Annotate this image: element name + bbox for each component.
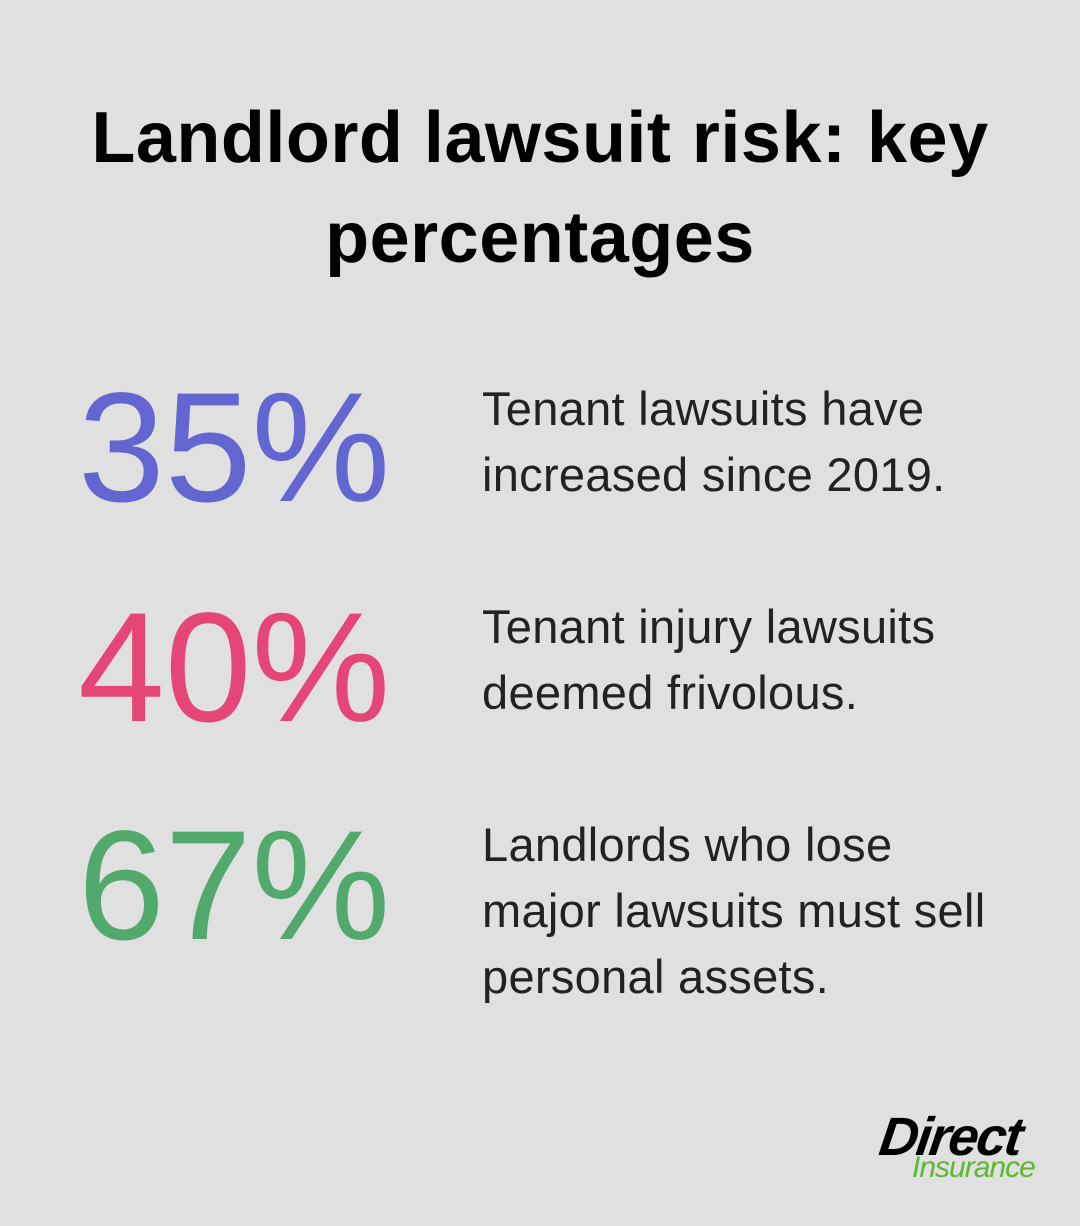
text: tenant lawsuits: increased since 2019. [482,448,946,501]
text: injury lawsuits: Tenant injury lawsuits [482,600,935,653]
number: 40%: 40% [78,581,390,755]
text: tenant lawsuits: Tenant lawsuits have [482,382,924,435]
logo: Direct [876,1107,1025,1167]
stat row: 67% [78,799,985,1003]
number: 67%: 67% [78,799,390,973]
text: landlords lose: personal assets. [482,950,829,1003]
text: landlords lose [482,818,985,1003]
title: percentages [325,198,755,278]
text: tenant lawsuits [482,382,946,501]
stat row: 40% [78,581,935,755]
title [91,98,989,278]
stat row: 35% [78,361,946,535]
title: Landlord lawsuit risk: key [91,98,989,178]
text: landlords lose: Landlords who lose [482,818,892,871]
text: injury lawsuits [482,600,935,719]
number: 35%: 35% [78,361,390,535]
text: injury lawsuits: deemed frivolous. [482,666,858,719]
logo: Insurance [912,1151,1035,1184]
text: landlords lose: major lawsuits must sell [482,884,985,937]
